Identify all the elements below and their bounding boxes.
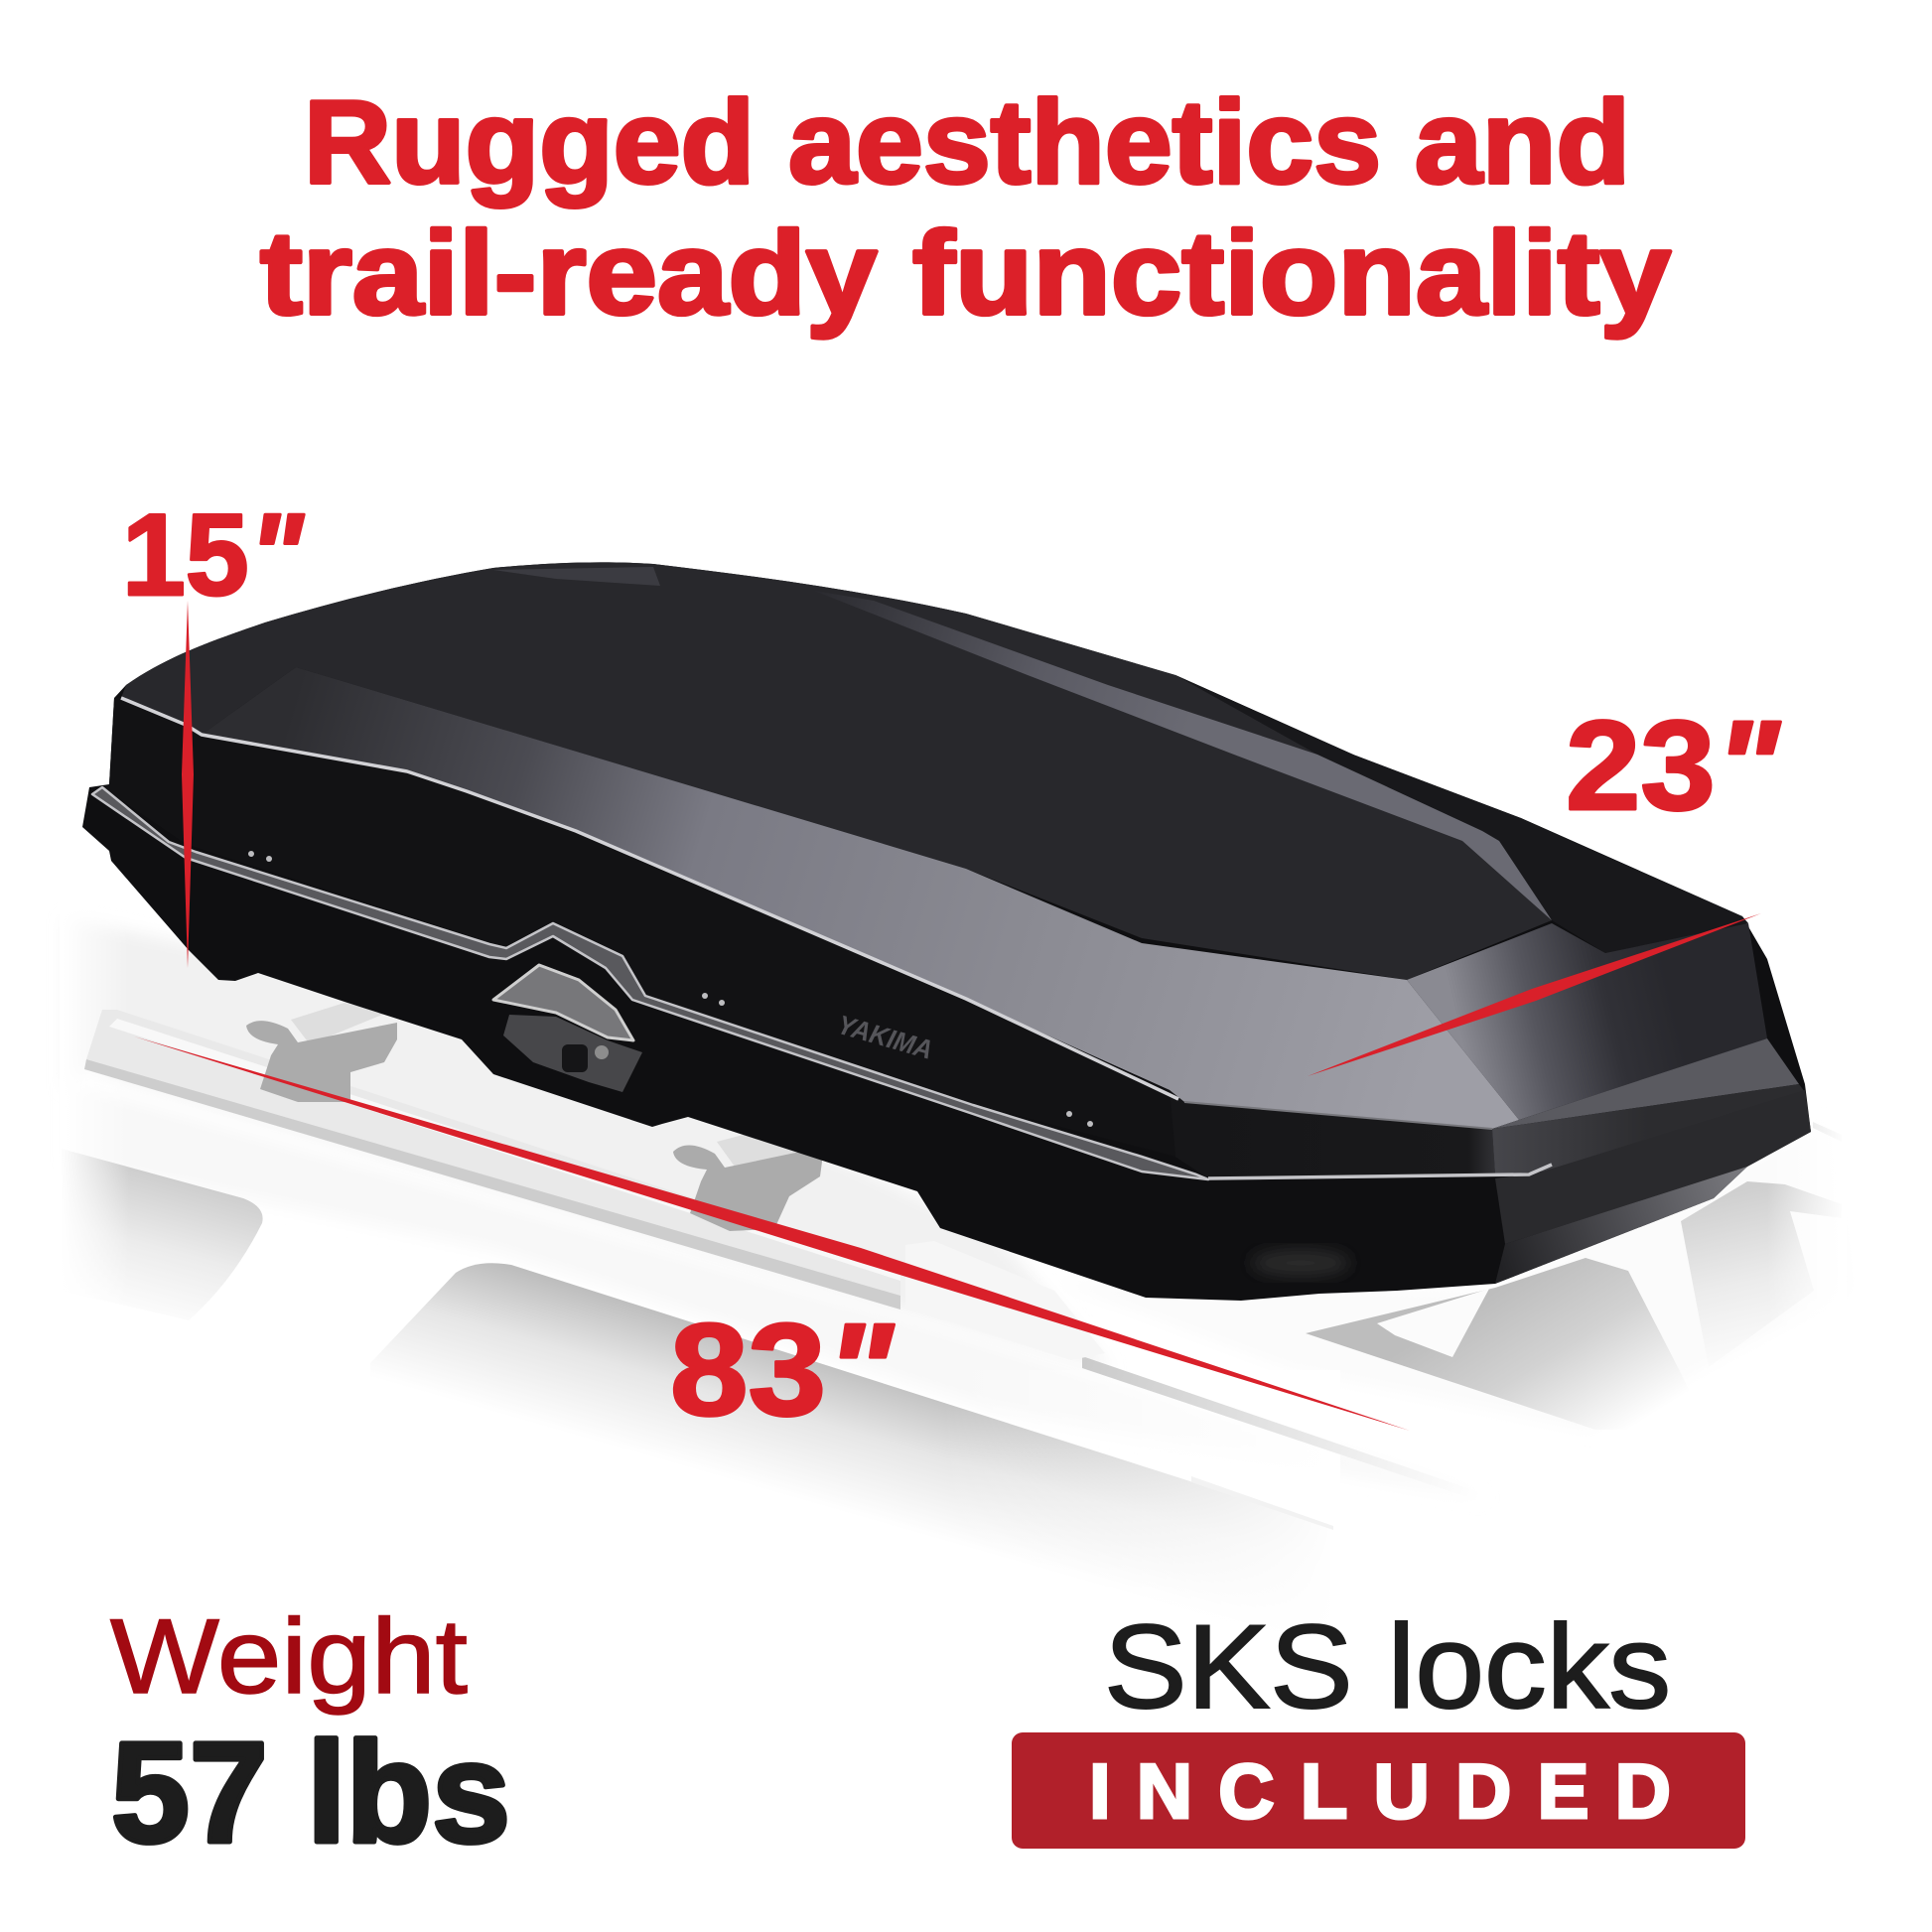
included badge (1012, 1732, 1745, 1849)
left edge fade (60, 894, 129, 1370)
included text: INCLUDED (1089, 1747, 1671, 1835)
lock body (503, 1015, 642, 1092)
title (260, 76, 1671, 340)
right edge fade (1767, 1112, 1847, 1449)
top front highlight (493, 567, 660, 586)
lid band right part (1492, 1084, 1805, 1174)
lower long rail (1082, 1356, 1479, 1501)
right window cutout (1377, 1289, 1489, 1357)
Yakima logo: YAKIMA (834, 1010, 936, 1065)
centre window fade to the right (943, 1370, 1340, 1698)
weight label: Weight (110, 1596, 468, 1716)
centre window shadow (370, 1263, 1330, 1688)
cargo box (82, 562, 1811, 1301)
rear rack bar (291, 1003, 387, 1044)
right second window shadow (1681, 1181, 1842, 1367)
lid side (102, 698, 1175, 1157)
SKS locks label: SKS locks (1104, 1600, 1671, 1733)
rail lower strip (84, 1059, 900, 1310)
chrome lip line (1208, 1165, 1552, 1178)
roof surface under box right (1052, 1122, 1847, 1430)
base blotch (1251, 1249, 1350, 1277)
lid shoulder thin line (1184, 1102, 1492, 1129)
weight value: 57 lbs (111, 1713, 510, 1872)
front rack bar (717, 1124, 824, 1173)
dark top panel (121, 562, 1552, 980)
height dimension line (182, 601, 194, 968)
width dimension line (1308, 913, 1761, 1076)
right window shadow (1306, 1258, 1708, 1430)
upper silver line (121, 698, 1178, 1099)
front rack tower (673, 1145, 824, 1231)
lower band right (1495, 1090, 1811, 1244)
length label: 83" (670, 1297, 895, 1443)
lower facet of the base (1495, 1167, 1747, 1284)
translucent bracket (905, 1241, 1105, 1360)
lid front band (1170, 1090, 1495, 1178)
grey band (202, 667, 1519, 1129)
roof surface between box and rail (66, 918, 1112, 1370)
lock cylinder (562, 1044, 588, 1072)
roof surface below rail (69, 1082, 1489, 1499)
lower silver trim (92, 787, 1208, 1179)
upper grey strip (814, 591, 1552, 920)
black rim at the far end (1175, 675, 1748, 953)
chrome handle (493, 965, 633, 1040)
height label: 15" (122, 489, 304, 620)
left window shadow (62, 1149, 263, 1320)
lower grey strip (1492, 1038, 1799, 1129)
far faint rail (1191, 1476, 1333, 1530)
width label: 23" (1566, 695, 1780, 837)
corner facet (1407, 923, 1767, 1120)
faded car roof background with rails and racks (60, 894, 1847, 1698)
rail top highlight (109, 1019, 900, 1281)
length dimension line (134, 1036, 1410, 1431)
rear rack tower (246, 1021, 397, 1102)
title: trail-ready functionality (260, 207, 1671, 340)
title: Rugged aesthetics and (304, 76, 1630, 208)
small rail end at right (1813, 1122, 1842, 1142)
rail body (86, 1010, 900, 1296)
box silhouette (82, 562, 1811, 1301)
rivets (248, 851, 1093, 1127)
lock key slot (595, 1045, 609, 1059)
